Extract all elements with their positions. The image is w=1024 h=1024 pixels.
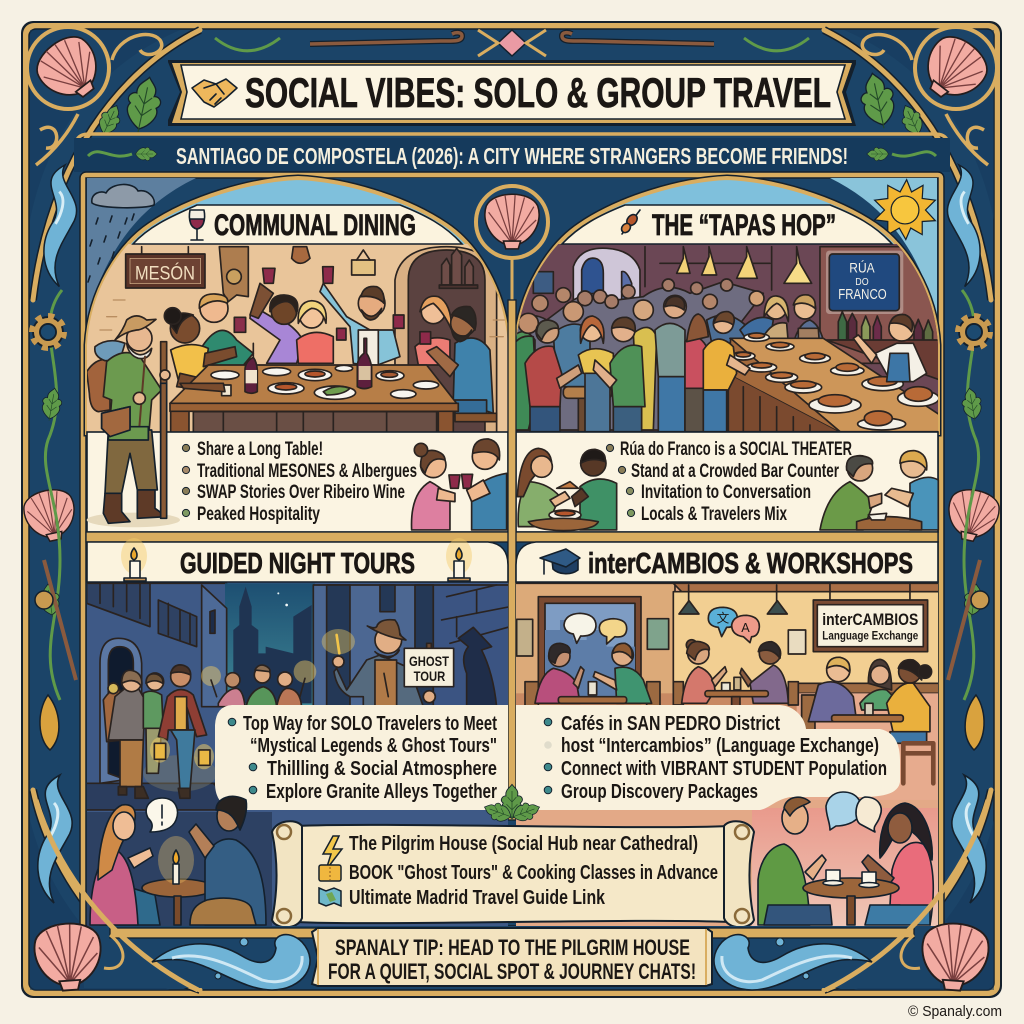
header: tapas hop <box>562 205 892 244</box>
speech bubble: exclamation <box>146 798 177 832</box>
bottom band with waves <box>36 800 988 990</box>
bullet list: tapas <box>606 439 852 525</box>
sign: Rúa do Franco: RÚA <box>849 259 875 275</box>
icon: scallop shell right side <box>943 486 1002 545</box>
illustration: couple toasting <box>412 439 507 530</box>
heading text: THE “TAPAS HOP” <box>652 209 836 242</box>
scene: mesón dining table <box>87 244 508 432</box>
copyright: © Spanaly.com <box>908 1003 1002 1020</box>
gold divider between rows <box>86 300 938 820</box>
bullet list: communal dining: Traditional MESONES & Albergues <box>197 461 417 482</box>
illustration: couple sharing tapas <box>517 448 617 531</box>
sign: ghost tour <box>404 648 454 687</box>
panel: intercambios text box: Cafés in SAN PEDRO District <box>561 713 780 735</box>
callout: Spanaly tip banner: FOR A QUIET, SOCIAL SPOT & JOURNEY CHATS! <box>328 959 696 984</box>
panel: tapas hop <box>33 178 1002 1020</box>
pilgrim figure <box>87 315 171 432</box>
speech bubbles <box>564 607 759 644</box>
scene: tapas bar <box>510 244 945 434</box>
illustration: coffee couple <box>758 792 933 925</box>
bullet list: communal dining <box>182 439 417 525</box>
subtitle strip <box>74 134 950 172</box>
bottles <box>838 312 934 340</box>
illustration: two men talking <box>820 451 938 530</box>
icon: rain cloud <box>88 184 154 282</box>
callout: parchment scroll: Ultimate Madrid Travel Guide Link <box>349 887 606 909</box>
icon: graduation cap <box>540 549 580 574</box>
speech bubbles <box>826 792 881 832</box>
header: communal dining <box>133 205 462 244</box>
panel: night tour text box: Thillling & Social Atmosphere <box>267 758 497 780</box>
icon: scallop shell left side <box>21 486 80 545</box>
sign: interCAMBIOS <box>813 600 928 652</box>
sign: Rúa do Franco <box>826 251 903 314</box>
panel: intercambios <box>515 582 940 926</box>
wooden table <box>170 338 458 435</box>
title banner <box>168 60 856 126</box>
top ornament: walking staffs and diamond <box>215 30 809 56</box>
bullet list: communal dining: Peaked Hospitality <box>197 504 320 525</box>
panel: night tour text box: “Mystical Legends & Ghost Tours" <box>250 735 497 757</box>
callout: Spanaly tip banner: SPANALY TIP: HEAD TO THE PILGRIM HOUSE <box>335 935 690 960</box>
tour group with lanterns <box>103 665 214 798</box>
illustration: candlelit couple <box>90 796 266 925</box>
icon: ticket <box>319 865 341 881</box>
bar staff behind counter <box>763 294 824 338</box>
icon: scallop shell bottom left <box>33 921 103 992</box>
panel: night tour text box: Explore Granite Alleys Together <box>266 781 497 803</box>
café patrons <box>525 640 933 783</box>
panel: intercambios text box: host “Intercambios” (Language Exchange) <box>561 735 879 757</box>
sign: Rúa do Franco: DO <box>855 277 869 288</box>
speech bubbles: A <box>741 621 750 635</box>
sign: mesón: MESÓN <box>135 261 195 284</box>
sign: ghost tour: TOUR <box>414 668 445 684</box>
foreground patrons <box>510 295 750 432</box>
icon: handshake <box>192 79 237 107</box>
callout: parchment scroll: BOOK "Ghost Tours" & Cooking Classes in Advance <box>349 862 718 884</box>
panel: night tour text box: Top Way for SOLO Travelers to Meet <box>243 713 497 735</box>
panel: intercambios text box: Group Discovery Packages <box>561 781 758 803</box>
heading text: COMMUNAL DINING <box>214 209 416 242</box>
panel: intercambios text box: Connect with VIBRANT STUDENT Population <box>561 758 887 780</box>
bullet list: communal dining: Share a Long Table! <box>197 439 323 460</box>
bullet list: tapas: Rúa do Franco is a SOCIAL THEATER <box>620 439 852 460</box>
sign: mesón <box>126 247 205 288</box>
icon: oak leaves right <box>856 70 928 140</box>
panel: tapas bullets <box>516 432 938 532</box>
side ornaments left <box>33 165 77 903</box>
icon: sun <box>875 180 935 240</box>
icon: lightning <box>323 836 342 870</box>
speech bubbles: 文 <box>717 608 730 627</box>
bartender <box>853 315 927 382</box>
panel: communal dining bullets <box>87 383 508 532</box>
heading text: GUIDED NIGHT TOURS <box>180 548 415 580</box>
heading text: interCAMBIOS & WORKSHOPS <box>588 548 913 580</box>
scene: night alley <box>80 583 510 810</box>
inner panel frame <box>80 172 944 942</box>
icon: scallop shell top right <box>912 28 996 111</box>
icon: scallop shell top left <box>28 28 112 111</box>
sign: interCAMBIOS: Language Exchange <box>822 629 919 643</box>
icon: map <box>319 888 341 906</box>
guide with hat and sign <box>322 620 454 707</box>
background crowd <box>510 279 773 430</box>
bullet list: tapas: Stand at a Crowded Bar Counter <box>631 461 839 482</box>
panel: intercambios text box <box>516 705 900 810</box>
icon: candle left <box>121 538 147 581</box>
sign: interCAMBIOS: interCAMBIOS <box>822 610 918 629</box>
bullet list: tapas: Invitation to Conversation <box>641 482 811 503</box>
side ornaments right <box>947 165 989 903</box>
panel: night tour text box <box>215 705 508 810</box>
callout: Spanaly tip banner <box>312 928 712 986</box>
icon: scallop shell bottom right <box>920 921 990 992</box>
panel: guided night tours <box>80 582 510 926</box>
icon: oak leaves left <box>94 74 165 139</box>
header: guided night tours <box>87 538 508 582</box>
sign: ghost tour: GHOST <box>409 653 449 669</box>
scroll text: The Pilgrim House (Social Hub near Cathedral) <box>349 833 698 855</box>
sign: Rúa do Franco: FRANCO <box>838 287 887 303</box>
icon: wine glass <box>189 210 205 240</box>
icon: leaf sprig above scroll <box>481 784 542 825</box>
icon: candle right <box>446 538 472 581</box>
center ornament: shell in medallion <box>298 178 727 432</box>
bullet list: communal dining: SWAP Stories Over Ribeiro Wine <box>197 482 405 503</box>
counter <box>728 333 940 432</box>
icon: tapas skewer <box>620 210 640 234</box>
scene: language exchange café <box>515 583 940 800</box>
panel: communal dining <box>33 178 1002 1020</box>
back row diners <box>164 267 497 422</box>
bullet list: tapas: Locals & Travelers Mix <box>641 504 787 525</box>
torch carriers <box>201 660 316 707</box>
header: intercambios <box>516 542 938 582</box>
callout: parchment scroll <box>272 821 754 927</box>
